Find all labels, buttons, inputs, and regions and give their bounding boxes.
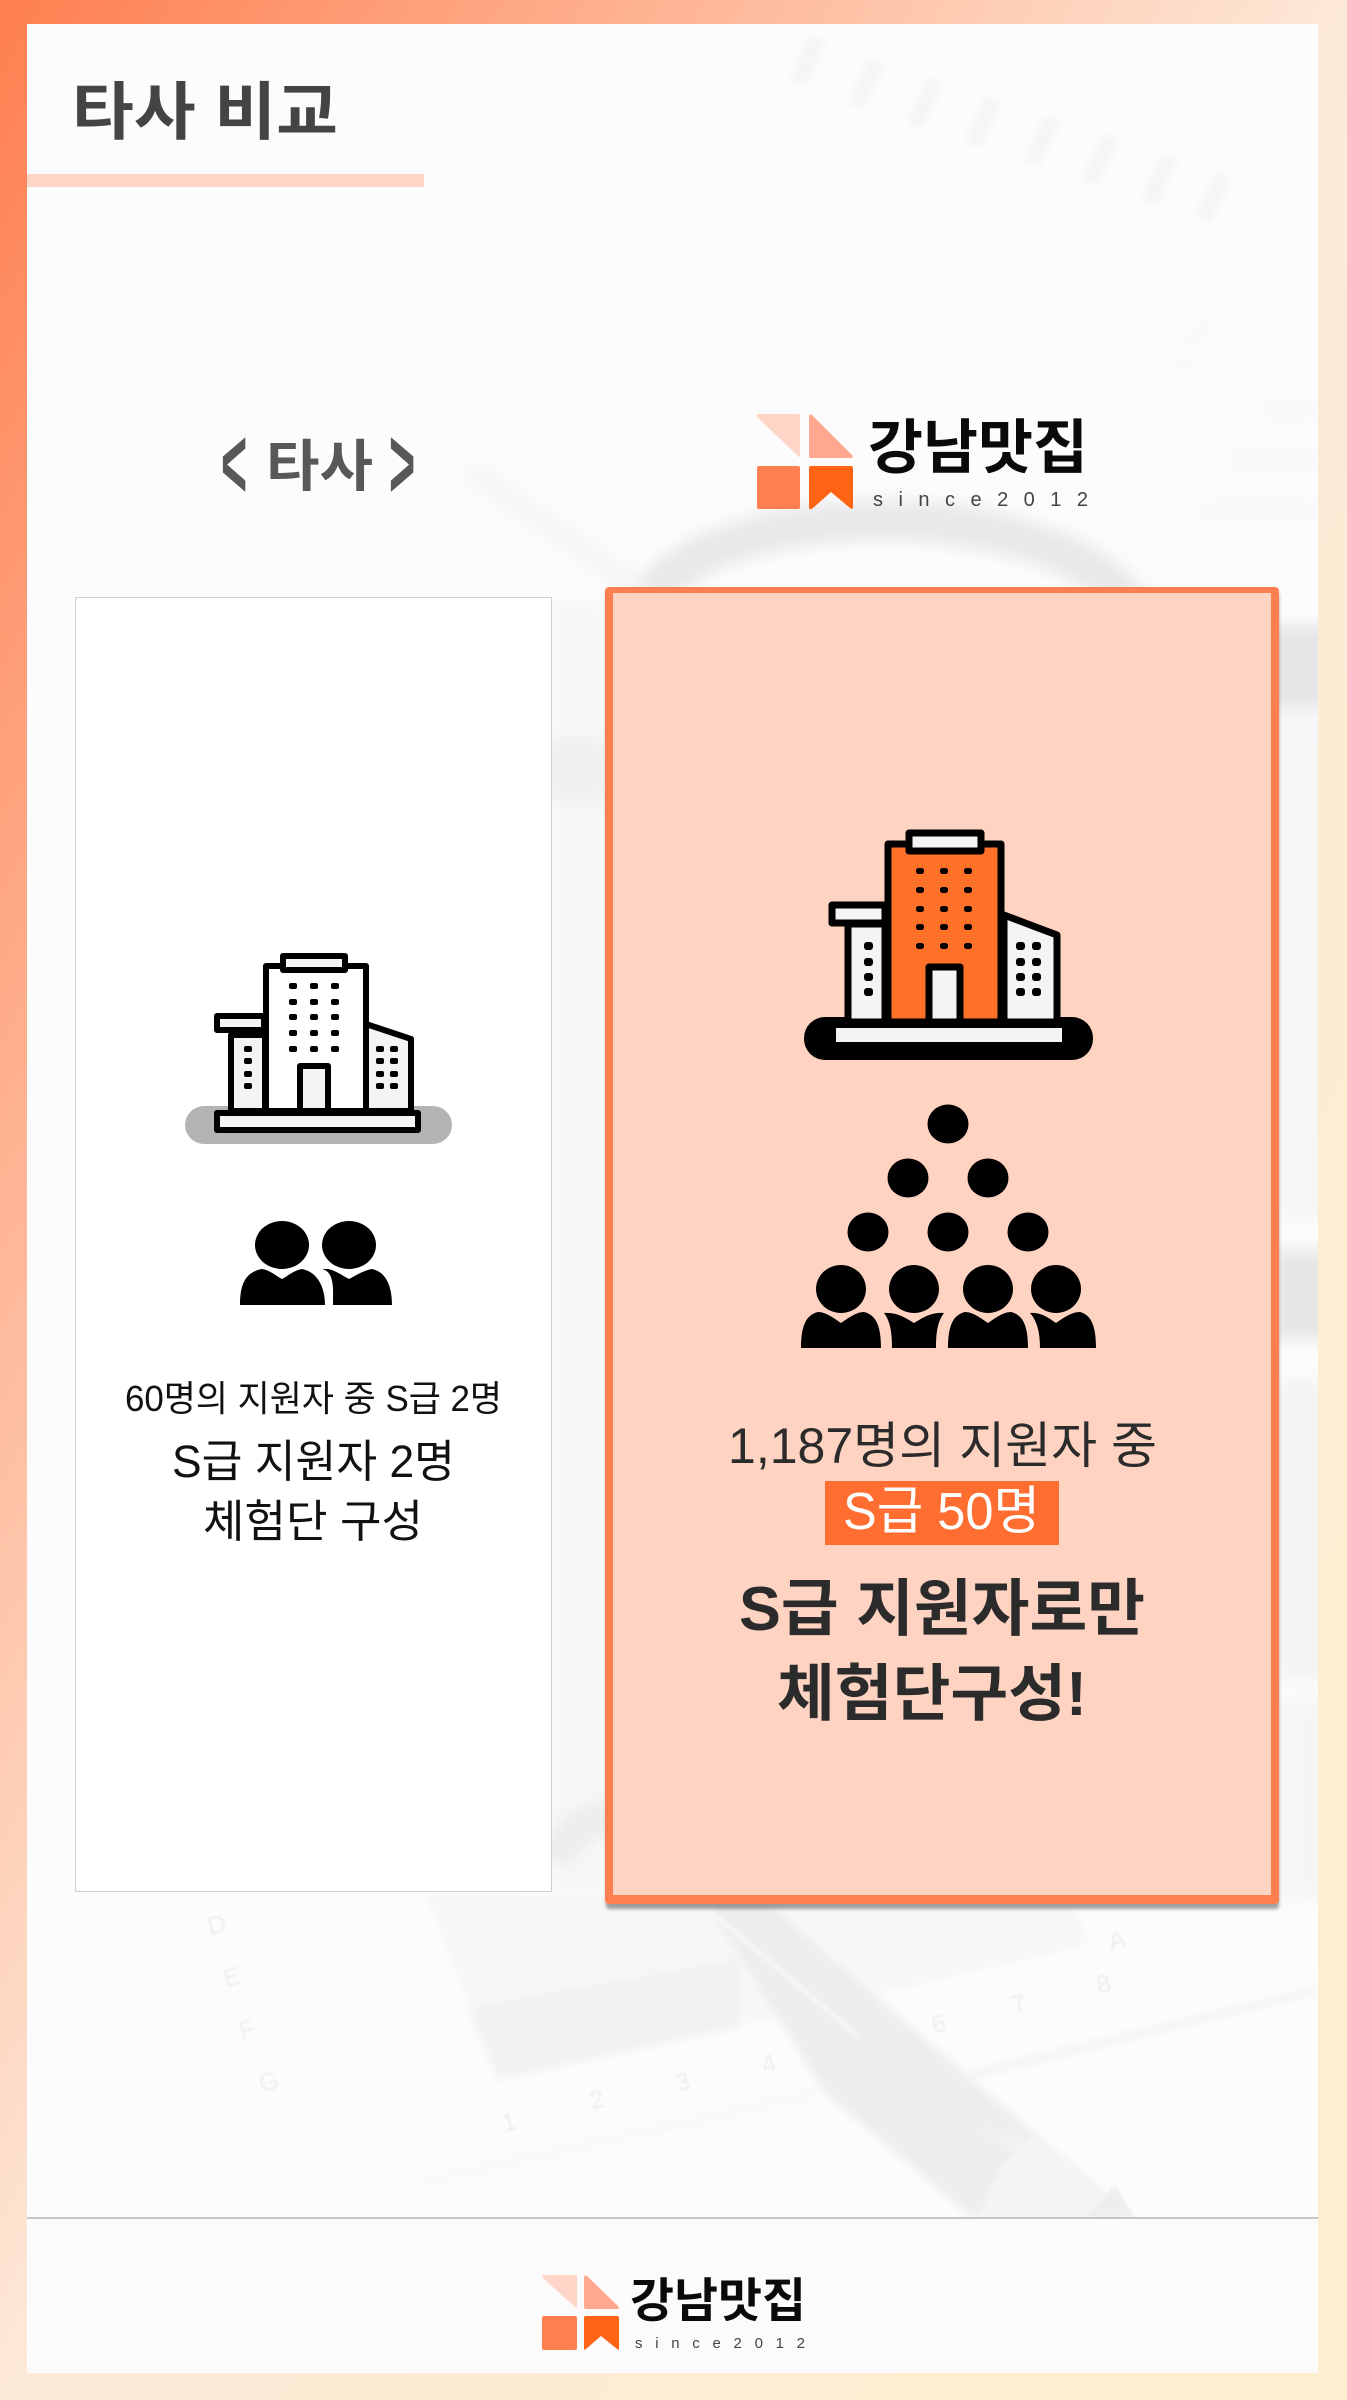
faint ruler marks in background photo — [205, 1909, 1129, 2138]
heading: others: > — [389, 406, 415, 520]
faint ruler marks in background photo: 6 — [929, 2009, 949, 2040]
faint ruler marks in background photo: 3 — [673, 2067, 693, 2098]
faint ruler marks in background photo: 1 — [499, 2107, 519, 2138]
text: conclusion: S급 지원자로만 — [739, 1575, 1145, 1644]
panel: other company — [76, 598, 552, 1892]
faint ruler marks in background photo: 2 — [587, 2085, 607, 2116]
logo: footer — [542, 2274, 806, 2352]
faint ruler marks in background photo: G — [256, 2066, 282, 2098]
badge: S grade 50: S급 50명 — [843, 1483, 1040, 1541]
text: composition: 체험단 구성 — [203, 1496, 423, 1547]
icon: crowd pyramid — [801, 1104, 1096, 1348]
logo: top — [757, 414, 1088, 511]
text: applicant count: 1,187명의 지원자 중 — [728, 1418, 1157, 1474]
text: composition — [172, 1436, 455, 1547]
heading: others — [221, 406, 415, 520]
title: 타사 비교 — [72, 78, 338, 148]
faint ruler marks in background photo: A — [1105, 1925, 1129, 1956]
logo: top: since2012 — [873, 489, 1088, 511]
icon: gray building — [185, 956, 452, 1144]
faint ruler marks in background photo: E — [220, 1962, 244, 1993]
faint ruler marks in background photo: 4 — [759, 2049, 779, 2080]
logo: footer: since2012 — [635, 2335, 805, 2352]
icon: two people — [240, 1221, 392, 1305]
title — [27, 78, 424, 187]
text: composition: S급 지원자 2명 — [172, 1436, 455, 1487]
text: applicant count: 60명의 지원자 중 S급 2명 — [125, 1378, 502, 1419]
heading: others: < — [221, 406, 247, 520]
faint ruler marks in background photo: F — [236, 2015, 258, 2046]
text: conclusion: 체험단구성! — [777, 1660, 1087, 1729]
heading: others: 타사 — [266, 435, 373, 498]
text: conclusion — [739, 1575, 1145, 1729]
faint ruler marks in background photo: D — [205, 1909, 229, 1941]
logo: footer: 강남맛집 — [630, 2274, 806, 2327]
title underline — [27, 174, 424, 187]
faint ruler marks in background photo: 8 — [1094, 1969, 1114, 2000]
faint ruler marks in background photo: 7 — [1009, 1989, 1029, 2020]
logo: top: 강남맛집 — [868, 415, 1088, 481]
icon: orange building — [804, 833, 1093, 1060]
panel: gangnam matzip — [605, 587, 1279, 1909]
footer divider — [27, 2217, 1318, 2219]
